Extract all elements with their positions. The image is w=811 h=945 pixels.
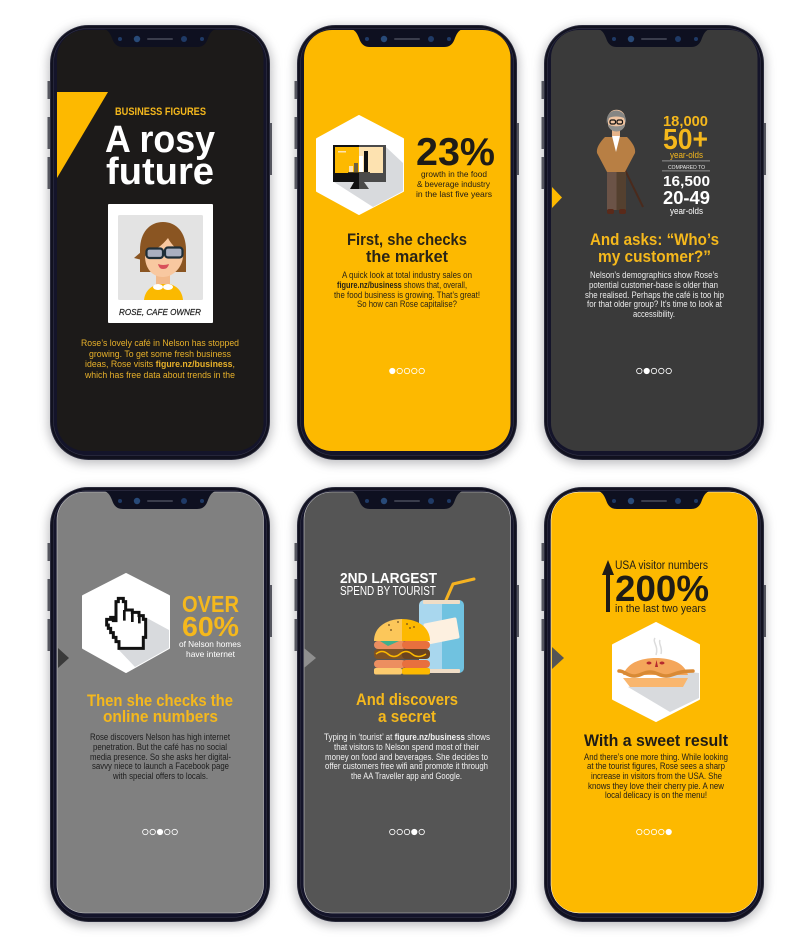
body text: [334, 270, 480, 309]
body text: for that older group? It’s time to look at: [587, 299, 722, 309]
heading: [87, 691, 233, 726]
statistic: 23%: [416, 131, 495, 199]
heading: [347, 230, 467, 266]
yellow corner triangle: [57, 92, 108, 178]
comparison label: COMPARED TO: [668, 165, 706, 171]
body text: offer customers free wifi and promote it through: [325, 761, 488, 771]
kicker: BUSINESS FIGURES: [115, 106, 206, 118]
pagination dots: [637, 829, 671, 835]
body text: the AA Traveller app and Google.: [351, 771, 462, 781]
pagination dots: [143, 829, 177, 835]
statistic: 200%: USA visitor numbers: [615, 560, 708, 572]
body text: growing. To get some fresh business: [89, 349, 231, 359]
phone 5: discovers a secret: [294, 488, 519, 926]
body text: Typing in ‘tourist’ at figure.nz/business shows: [324, 732, 490, 742]
heading: And discovers: [356, 690, 458, 709]
statistic: over 60%: of Nelson homes: [179, 639, 241, 649]
statistic: 20-49 year-olds: 20-49: [663, 188, 710, 208]
heading: a secret: [378, 707, 436, 726]
pagination dots: [390, 829, 424, 835]
heading: Then she checks the: [87, 691, 233, 710]
statistic: 2nd largest spend: [340, 570, 437, 598]
icon: cherry pie in hexagon: [613, 623, 699, 721]
heading: [590, 230, 719, 266]
body text: [584, 752, 728, 800]
body text: knows they love their cherry pie. A new: [588, 781, 724, 791]
statistic: 23%: growth in the food: [421, 169, 487, 179]
statistic: 50+ year-olds: 18,000: [663, 113, 708, 130]
heading: And asks: “Who’s: [590, 230, 719, 249]
statistic: 2nd largest spend: 2ND LARGEST: [340, 570, 437, 587]
body text: media presence. So she asks her digital-: [90, 752, 231, 762]
body text: local delicacy is on the menu!: [605, 790, 707, 800]
body text: the food business is growing. That’s great!: [334, 290, 480, 300]
body text: So how can Rose capitalise?: [357, 299, 457, 309]
body text: accessibility.: [633, 309, 675, 319]
statistic: 23%: & beverage industry: [417, 179, 491, 189]
body text: she realised. Perhaps the café is too hip: [585, 290, 724, 300]
statistic: 23%: 23%: [416, 131, 495, 174]
screen background: [551, 492, 758, 913]
body text: penetration. But the café has no social: [93, 742, 227, 752]
statistic: 23%: in the last five years: [416, 189, 492, 199]
body text: And there’s one more thing. While looking: [584, 752, 728, 762]
statistic: 50+ year-olds: [663, 113, 708, 160]
icon: computer monitor in hexagon: [317, 116, 403, 214]
statistic: 200%: 200%: [615, 568, 709, 609]
pagination dots: [390, 368, 424, 374]
body text: [324, 732, 490, 781]
icon: burger: [374, 619, 430, 674]
icon: older man with cane: [597, 110, 643, 214]
title: future: [106, 151, 214, 193]
title: A rosy: [105, 119, 215, 161]
phone 1: a rosy future: [48, 26, 272, 464]
statistic: 20-49 year-olds: 16,500: [663, 173, 710, 190]
statistic: over 60%: 60%: [182, 611, 239, 642]
statistic: 20-49 year-olds: year-olds: [670, 206, 703, 216]
statistic: 2nd largest spend: SPEND BY TOURIST: [340, 584, 436, 598]
screen background: [551, 30, 758, 451]
pagination dots: [637, 368, 671, 374]
statistic: 50+ year-olds: year-olds: [670, 150, 703, 160]
arrow marker: [304, 648, 316, 668]
heading: [356, 690, 458, 726]
body text: ideas, Rose visits figure.nz/business,: [85, 359, 235, 369]
phone 3: who's my customer: [542, 26, 766, 464]
body text: figure.nz/business shows that, overall,: [337, 280, 467, 290]
body text: [90, 732, 231, 781]
statistic: over 60%: have internet: [186, 649, 236, 659]
body text: A quick look at total industry sales on: [342, 270, 472, 280]
body text: Nelson’s demographics show Rose’s: [590, 270, 718, 280]
arrow marker: [552, 647, 564, 669]
body text: with special offers to locals.: [112, 771, 208, 781]
statistic: 50+ year-olds: 50+: [663, 124, 708, 156]
body text: Rose discovers Nelson has high internet: [90, 732, 230, 742]
statistic: 200%: in the last two years: [615, 603, 706, 615]
body text: potential customer-base is older than: [589, 280, 718, 290]
body text: savvy niece to launch a Facebook page: [92, 761, 229, 771]
body text: increase in visitors from the USA. She: [591, 771, 722, 781]
phone 2: checks the market: [294, 26, 519, 464]
statistic: 20-49 year-olds: [663, 173, 710, 216]
body text: [585, 270, 724, 319]
statistic: over 60%: OVER: [182, 591, 239, 617]
statistic: over 60%: [179, 591, 241, 659]
body text: money on food and beverages. She decides to: [325, 752, 488, 762]
icon: up arrow: [602, 560, 614, 612]
polaroid portrait of Rose: ROSE, CAFE OWNER: [119, 308, 201, 317]
body text: which has free data about trends in the: [84, 370, 235, 380]
heading: online numbers: [103, 707, 218, 726]
arrow marker: [58, 648, 69, 668]
heading: my customer?”: [598, 247, 711, 266]
screen background: [304, 492, 510, 913]
icon: pointing hand in hexagon: [83, 574, 169, 672]
polaroid portrait of Rose: [108, 204, 213, 323]
body text: Rose’s lovely café in Nelson has stopped: [81, 338, 239, 348]
heading: the market: [366, 247, 448, 266]
phone 6: sweet result: [542, 488, 766, 926]
title: [105, 119, 215, 193]
screen background: [57, 30, 264, 451]
screen background: [57, 492, 264, 913]
arrow marker: [552, 187, 562, 208]
body text: that visitors to Nelson spend most of their: [334, 742, 479, 752]
body text: at the tourist figures, Rose sees a sharp: [587, 761, 725, 771]
phone 4: online numbers: [48, 488, 272, 926]
icon: drink can: [419, 579, 474, 673]
screen background: [304, 30, 510, 451]
heading: With a sweet result: [584, 731, 728, 750]
body text: [81, 338, 239, 380]
heading: First, she checks: [347, 230, 467, 249]
